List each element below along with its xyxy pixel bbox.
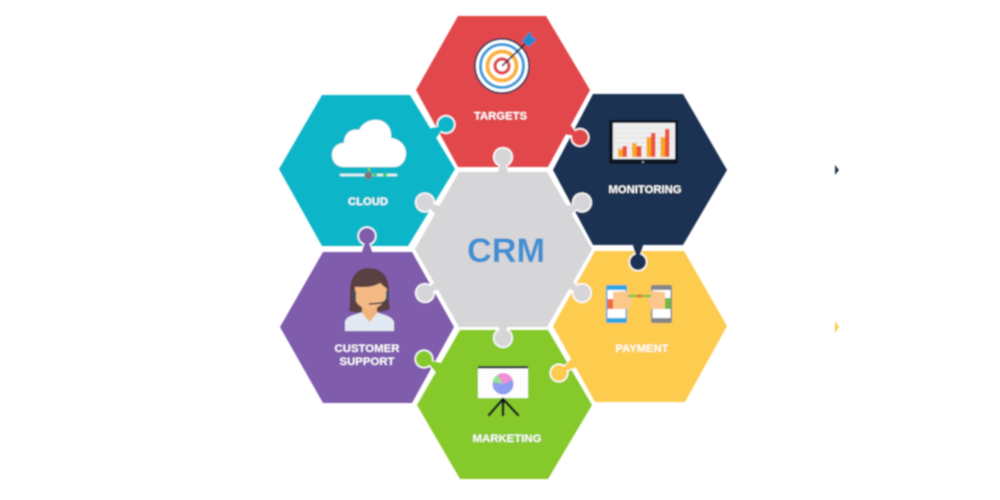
label: customer support: SUPPORT — [340, 356, 395, 368]
connector: monitoring into payment — [628, 242, 648, 272]
panel: CRM centre — [415, 172, 592, 327]
connector: CRM into customer support — [415, 278, 444, 303]
connector: marketing into customer support — [414, 350, 444, 374]
connector: CRM into monitoring — [563, 192, 592, 217]
panel: monitoring — [553, 94, 727, 245]
label: payment: PAYMENT — [616, 343, 669, 355]
icon: cloud network — [332, 120, 406, 180]
connector: CRM into payment — [563, 277, 592, 303]
panel: payment — [553, 251, 727, 402]
label: monitoring: MONITORING — [608, 184, 682, 196]
label: targets: TARGETS — [474, 110, 527, 122]
connector: CRM into targets — [493, 147, 513, 175]
connector: customer support into cloud — [358, 226, 376, 255]
icon: support agent — [345, 268, 394, 331]
connector: payment into marketing — [550, 356, 580, 382]
connector: CRM into cloud — [415, 192, 444, 217]
connector: cloud into targets — [429, 115, 456, 139]
marker: yellow sliver — [835, 321, 839, 333]
panel: marketing — [417, 330, 592, 479]
icon: monitor bar chart — [609, 120, 678, 164]
label: customer support — [334, 343, 400, 368]
puzzle connectors — [358, 115, 648, 382]
icon: target with arrow — [475, 31, 537, 93]
icon: phone to phone payment — [606, 285, 672, 323]
label: cloud: CLOUD — [348, 196, 388, 208]
label: CRM: CRM — [467, 232, 545, 270]
label: customer support: CUSTOMER — [334, 343, 400, 355]
panel: targets — [416, 16, 590, 167]
icon: presentation board — [478, 366, 528, 415]
connector: targets into monitoring — [563, 124, 590, 147]
marker: dark sliver — [835, 165, 839, 175]
label: marketing: MARKETING — [472, 433, 542, 445]
panel: cloud — [279, 95, 455, 246]
connector: CRM into marketing — [493, 323, 513, 348]
panel: customer support — [280, 252, 454, 403]
